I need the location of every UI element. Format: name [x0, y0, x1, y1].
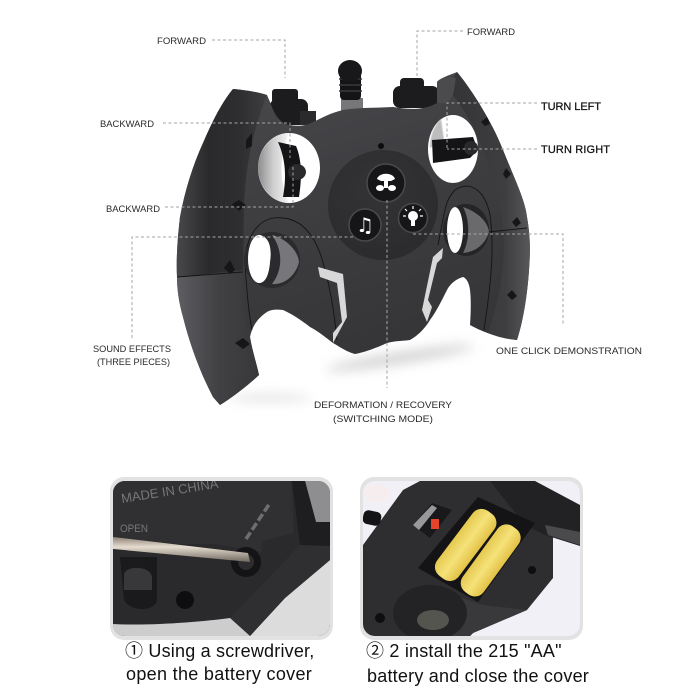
label: sound effects: SOUND EFFECTS — [93, 344, 171, 355]
screw hole — [231, 547, 261, 577]
small hole — [176, 591, 194, 609]
label: turn right: TURN RIGHT — [541, 144, 610, 156]
moulded text: OPEN — [120, 523, 148, 535]
infographic canvas — [94, 28, 642, 686]
latch — [120, 557, 157, 609]
wing upper right — [490, 481, 580, 546]
white trim right — [422, 248, 443, 322]
light lower strip — [113, 618, 250, 636]
centre button disk — [328, 150, 438, 260]
right wing — [447, 72, 530, 340]
cover plate — [113, 481, 124, 492]
caption: step 1: ① Using a screwdriver, — [125, 637, 314, 663]
icon: deformation button — [367, 164, 405, 202]
icon: antenna — [338, 60, 363, 112]
label: deformation recovery: DEFORMATION / RECOVERY — [314, 400, 453, 411]
icon: music button: ♫ — [356, 213, 374, 237]
controller underside — [363, 481, 553, 636]
lens — [378, 143, 384, 149]
lighter lower panel — [452, 598, 527, 636]
caption: step 1 — [125, 637, 314, 684]
icon: left shoulder knob — [270, 89, 316, 125]
icon: embossed key — [246, 503, 270, 539]
lower left hole — [244, 232, 300, 288]
lighter upper right corner — [305, 481, 330, 522]
dashed leader lines — [132, 31, 563, 388]
panel: step 1 photo — [110, 476, 333, 640]
AA batteries — [434, 508, 521, 596]
caption: step 2: battery and close the cover — [367, 666, 589, 686]
icon: light button — [398, 204, 428, 232]
caption: step 2 — [366, 637, 589, 686]
top left white hole — [258, 133, 320, 203]
icon: right shoulder knob — [393, 78, 439, 108]
controller photo — [177, 60, 530, 405]
left wing upper — [177, 89, 267, 277]
screwdriver — [113, 537, 250, 562]
icon: music button — [349, 209, 381, 241]
label: deformation recovery — [314, 400, 453, 425]
switch — [413, 503, 452, 538]
label: turn left: TURN LEFT — [541, 101, 601, 113]
white trim left — [318, 267, 347, 343]
label: backward upper: BACKWARD — [100, 119, 154, 130]
callout labels — [93, 27, 642, 425]
peak piece — [437, 77, 456, 103]
battery compartment — [418, 497, 535, 602]
wing studs — [224, 117, 521, 349]
label: deformation recovery: (SWITCHING MODE) — [333, 414, 433, 425]
moulded text — [120, 481, 219, 532]
wing seams — [177, 186, 527, 340]
dark band — [250, 545, 330, 636]
left wing lower — [177, 272, 259, 405]
moulded text: MADE IN CHINA — [120, 476, 220, 506]
caption: step 2: ② 2 install the 215 "AA" — [366, 637, 562, 663]
label: backward lower: BACKWARD — [106, 204, 160, 215]
top right white hole — [428, 115, 478, 183]
large hole — [393, 585, 467, 641]
lower left hole — [375, 613, 385, 623]
stub antenna — [363, 510, 382, 526]
label: forward right: FORWARD — [467, 27, 515, 38]
panel: step 2 photo — [360, 477, 583, 641]
label: sound effects — [93, 344, 171, 368]
floor shadow — [228, 341, 475, 401]
caption: step 1: open the battery cover — [126, 664, 312, 684]
white lower right area — [250, 560, 330, 636]
label: one click demonstration: ONE CLICK DEMONSTRATION — [496, 346, 642, 357]
label: sound effects: (THREE PIECES) — [97, 357, 170, 368]
lower right hole — [443, 204, 489, 256]
label: forward left: FORWARD — [157, 36, 206, 47]
pink tint — [362, 484, 390, 502]
controller body — [177, 72, 530, 405]
